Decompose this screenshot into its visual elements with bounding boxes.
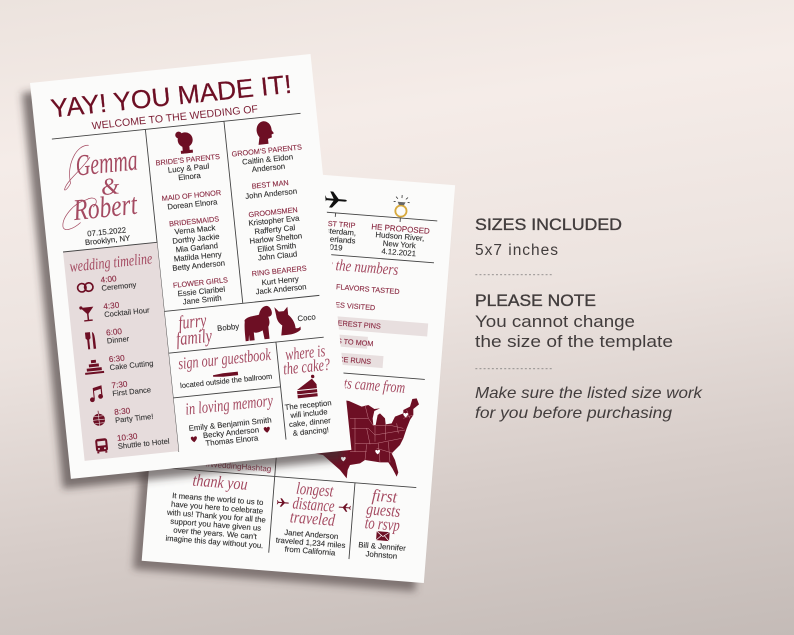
row: ceremony: Ceremony bbox=[101, 280, 137, 293]
heading: by the numbers: by the numbers bbox=[320, 256, 399, 279]
panel: back card bbox=[142, 163, 455, 583]
bar chart: the numbers: 5 CAKE FLAVORS TASTED bbox=[308, 280, 400, 296]
first trip text: FIRST TRIP bbox=[316, 218, 356, 230]
he proposed text: Hudson River, bbox=[375, 230, 425, 243]
heading: guests came from: where guests came from bbox=[290, 371, 406, 397]
bar chart: the numbers: 9 ICE RUNS bbox=[330, 354, 372, 366]
text block: please note: the size of the template bbox=[475, 333, 673, 351]
he proposed text: New York bbox=[383, 239, 416, 250]
row: cake cutting bbox=[84, 351, 154, 375]
couple names: 07.15.2022 bbox=[87, 225, 127, 238]
panel: thank you: imagine this day without you. bbox=[165, 534, 264, 550]
panel: groom party: GROOM'S PARENTS bbox=[231, 142, 302, 159]
icon: heart south bbox=[375, 450, 380, 454]
panel: bride party: BRIDE'S PARENTS bbox=[155, 152, 220, 167]
icon: cocktail bbox=[79, 305, 95, 322]
row: shuttle: Shuttle to Hotel bbox=[117, 437, 170, 451]
panel: first guests to rsvp: Bill & Jennifer bbox=[358, 540, 407, 553]
panel: thank you: over the years. We can't bbox=[173, 526, 258, 541]
he proposed text bbox=[369, 222, 430, 259]
panel: bride party: Matilda Henry bbox=[173, 250, 222, 264]
he proposed text: HE PROPOSED bbox=[371, 222, 430, 236]
panel: groom party: Harlow Shelton bbox=[249, 231, 303, 246]
panel: first guests to rsvp: to rsvp bbox=[364, 513, 401, 535]
icon: bride silhouette bbox=[175, 130, 194, 154]
icon: heart right bbox=[264, 427, 270, 433]
icon: engagement ring bbox=[393, 194, 410, 217]
panel: longest distance traveled: Janet Anderson bbox=[284, 528, 339, 541]
panel: thank you bbox=[164, 469, 269, 550]
couple names: Gemma bbox=[74, 143, 139, 183]
icon: fork and knife bbox=[85, 332, 96, 350]
row: shuttle: 10:30 bbox=[117, 432, 138, 443]
icon: pen bbox=[213, 372, 238, 378]
panel: groom party: John Claud bbox=[258, 249, 298, 262]
panel: first guests to rsvp: guests bbox=[366, 499, 401, 521]
panel: furry family: Coco bbox=[297, 312, 317, 323]
panel: in loving memory: Emily & Benjamin Smith bbox=[188, 415, 272, 433]
map: guests came from bbox=[295, 392, 419, 478]
heading: wedding timeline: wedding timeline bbox=[69, 250, 153, 276]
icon: rings bbox=[77, 282, 93, 292]
icon: dog bbox=[242, 305, 275, 341]
panel: longest distance traveled: traveled 1,234 miles bbox=[275, 536, 346, 550]
row: first dance bbox=[88, 377, 152, 402]
row: cake cutting: 6:30 bbox=[108, 353, 126, 364]
panel: bride party: Verna Mack bbox=[174, 223, 216, 236]
panel: thank you: have you here to celebrate bbox=[171, 500, 263, 516]
icon: heart texas bbox=[341, 457, 346, 461]
panel: groom party: Elliot Smith bbox=[257, 241, 297, 254]
panel: furry family bbox=[173, 299, 318, 350]
panel: in loving memory: Becky Anderson bbox=[203, 425, 260, 440]
text block: sizes included: 5x7 inches bbox=[475, 242, 558, 259]
first trip text: 2019 bbox=[325, 242, 343, 253]
panel: bride party: FLOWER GIRLS bbox=[173, 275, 228, 290]
text block: purchase reminder bbox=[475, 385, 703, 422]
panel: bride party: Jane Smith bbox=[182, 293, 222, 306]
panel: groom party: Kurt Henry bbox=[261, 274, 299, 287]
panel: where is the cake bbox=[278, 341, 337, 438]
panel: in loving memory bbox=[184, 391, 277, 450]
panel: bride party: Dorean Elnora bbox=[167, 197, 218, 212]
panel: where is the cake: the cake? bbox=[282, 355, 331, 378]
couple names bbox=[55, 140, 146, 249]
panel: front card bbox=[30, 54, 351, 479]
text block: please note bbox=[475, 292, 673, 351]
panel: in loving memory: in loving memory bbox=[184, 391, 274, 419]
panel: bride party: Betty Anderson bbox=[172, 258, 225, 273]
text: ------------------- bbox=[475, 364, 552, 373]
icon: cake slice bbox=[296, 374, 318, 398]
icon: wedding cake bbox=[84, 359, 104, 375]
couple names: & bbox=[100, 173, 121, 201]
row: cake cutting: Cake Cutting bbox=[109, 359, 154, 372]
panel: where is the cake: The reception bbox=[284, 398, 332, 412]
text block: sizes included: SIZES INCLUDED bbox=[475, 216, 622, 234]
panel: groom party: Caitlin & Eldon bbox=[242, 152, 294, 167]
text block: please note: PLEASE NOTE bbox=[475, 292, 596, 310]
row: ceremony: 4:00 bbox=[100, 274, 117, 285]
panel: where is the cake: cake, dinner bbox=[289, 416, 332, 429]
row: ceremony bbox=[77, 272, 137, 295]
panel: longest distance traveled: traveled bbox=[289, 507, 336, 530]
row: party time: 8:30 bbox=[114, 406, 131, 417]
panel: longest distance traveled: longest bbox=[296, 479, 335, 501]
icon: music notes bbox=[89, 385, 103, 402]
panel: thank you: thank you bbox=[192, 471, 248, 494]
panel: longest distance traveled: from California bbox=[284, 544, 336, 557]
panel: groom party: John Anderson bbox=[245, 187, 298, 201]
panel: furry family: family bbox=[175, 326, 213, 350]
panel: groom party: Kristopher Eva bbox=[248, 213, 300, 228]
bar chart: the numbers: 12 CITIES VISITED bbox=[311, 298, 376, 312]
panel: bride party: Essie Claribel bbox=[177, 285, 226, 298]
icon: cat bbox=[274, 305, 301, 336]
panel: first guests to rsvp bbox=[357, 485, 411, 561]
panel: groom party: BEST MAN bbox=[251, 178, 289, 191]
panel: bride party: BRIDESMAIDS bbox=[169, 214, 220, 228]
row: dinner bbox=[85, 326, 130, 350]
icon: heart left bbox=[191, 436, 197, 443]
couple names: Robert bbox=[71, 188, 139, 227]
panel: groom party: RING BEARERS bbox=[251, 264, 307, 278]
row: dinner: 6:00 bbox=[106, 327, 123, 337]
icon: envelope bbox=[376, 531, 390, 541]
row: dinner: Dinner bbox=[106, 334, 130, 345]
panel: first guests to rsvp: Johnston bbox=[365, 549, 398, 561]
panel: bride party: Mia Garland bbox=[175, 241, 218, 254]
panel: thank you: with us! Thank you for all the bbox=[166, 508, 266, 525]
icon: plane left bbox=[277, 498, 289, 507]
icon: heart northeast bbox=[403, 413, 408, 417]
text block: please note: You cannot change bbox=[475, 313, 635, 331]
panel: guestbook bbox=[177, 345, 274, 390]
subtitle: WELCOME TO THE WEDDING OF bbox=[91, 103, 259, 132]
panel: bride party: MAID OF HONOR bbox=[161, 188, 222, 203]
row: first dance: First Dance bbox=[112, 385, 151, 398]
panel: longest distance traveled bbox=[273, 477, 353, 558]
row: party time bbox=[92, 404, 154, 427]
panel: first guests to rsvp: first bbox=[371, 486, 399, 507]
icon: plane right bbox=[338, 503, 351, 512]
panel: wedding timeline bbox=[63, 242, 179, 461]
first trip text: Amsterdam, bbox=[314, 225, 356, 238]
text block: purchase reminder: Make sure the listed size work bbox=[475, 385, 703, 402]
bar chart: the numbers bbox=[258, 277, 431, 371]
row: cocktail hour: 4:30 bbox=[103, 301, 120, 311]
panel: longest distance traveled: distance bbox=[292, 493, 336, 516]
text block: purchase reminder: for you before purchasing bbox=[475, 405, 672, 422]
hashtag: #WeddingHashtag bbox=[205, 460, 272, 474]
panel: bride party bbox=[155, 152, 235, 308]
row: cocktail hour: Cocktail Hour bbox=[104, 305, 150, 319]
first trip text: Netherlands bbox=[313, 233, 356, 246]
panel: where is the cake: where is bbox=[284, 341, 326, 364]
back card shadow bbox=[133, 171, 446, 591]
panel: bride party: Dorthy Jackie bbox=[172, 232, 220, 246]
panel: groom party: Anderson bbox=[251, 162, 286, 174]
panel: where is the cake: & dancing! bbox=[292, 425, 329, 438]
icon: airplane bbox=[323, 191, 347, 209]
panel: groom party: GROOMSMEN bbox=[248, 205, 298, 219]
panel: thank you: support you have given us bbox=[170, 517, 262, 533]
panel: bride party: Elnora bbox=[178, 171, 202, 182]
title: YAY! YOU MADE IT! bbox=[49, 69, 293, 123]
panel: guestbook: located outside the ballroom bbox=[180, 372, 273, 390]
flourish: name swashes bbox=[55, 145, 99, 230]
text block: sizes included bbox=[475, 216, 622, 259]
panel: groom party: Rafferty Cal bbox=[254, 223, 296, 236]
panel: groom party: Jack Anderson bbox=[255, 282, 307, 296]
panel: where is the cake: will include bbox=[289, 407, 328, 420]
icon: disco ball bbox=[92, 410, 106, 426]
he proposed text: 4.12.2021 bbox=[381, 247, 416, 258]
panel: bride party: Lucy & Paul bbox=[167, 162, 210, 175]
panel: furry family: Bobby bbox=[217, 322, 240, 333]
row: first dance: 7:30 bbox=[111, 380, 128, 390]
text: ------------------- bbox=[475, 270, 552, 279]
panel: guestbook: sign our guestbook bbox=[177, 345, 272, 373]
first trip text bbox=[313, 218, 357, 254]
panel: furry family: furry bbox=[177, 310, 208, 334]
bar chart: the numbers: 52 CALLS TO MOM bbox=[308, 334, 374, 348]
row: cocktail hour bbox=[79, 298, 151, 322]
front card shadow bbox=[22, 64, 343, 489]
panel: groom party bbox=[231, 142, 317, 297]
icon: bus bbox=[95, 438, 108, 454]
panel: thank you: It means the world to us to bbox=[172, 491, 264, 507]
timeline rule bbox=[180, 201, 437, 225]
couple names: Brooklyn, NY bbox=[84, 233, 131, 247]
panel: in loving memory: Thomas Elnora bbox=[205, 433, 259, 448]
icon: groom silhouette bbox=[256, 120, 275, 145]
bar chart: the numbers: 168 PINTEREST PINS bbox=[307, 316, 381, 331]
row: party time: Party Time! bbox=[115, 412, 154, 425]
row: shuttle bbox=[95, 429, 170, 454]
